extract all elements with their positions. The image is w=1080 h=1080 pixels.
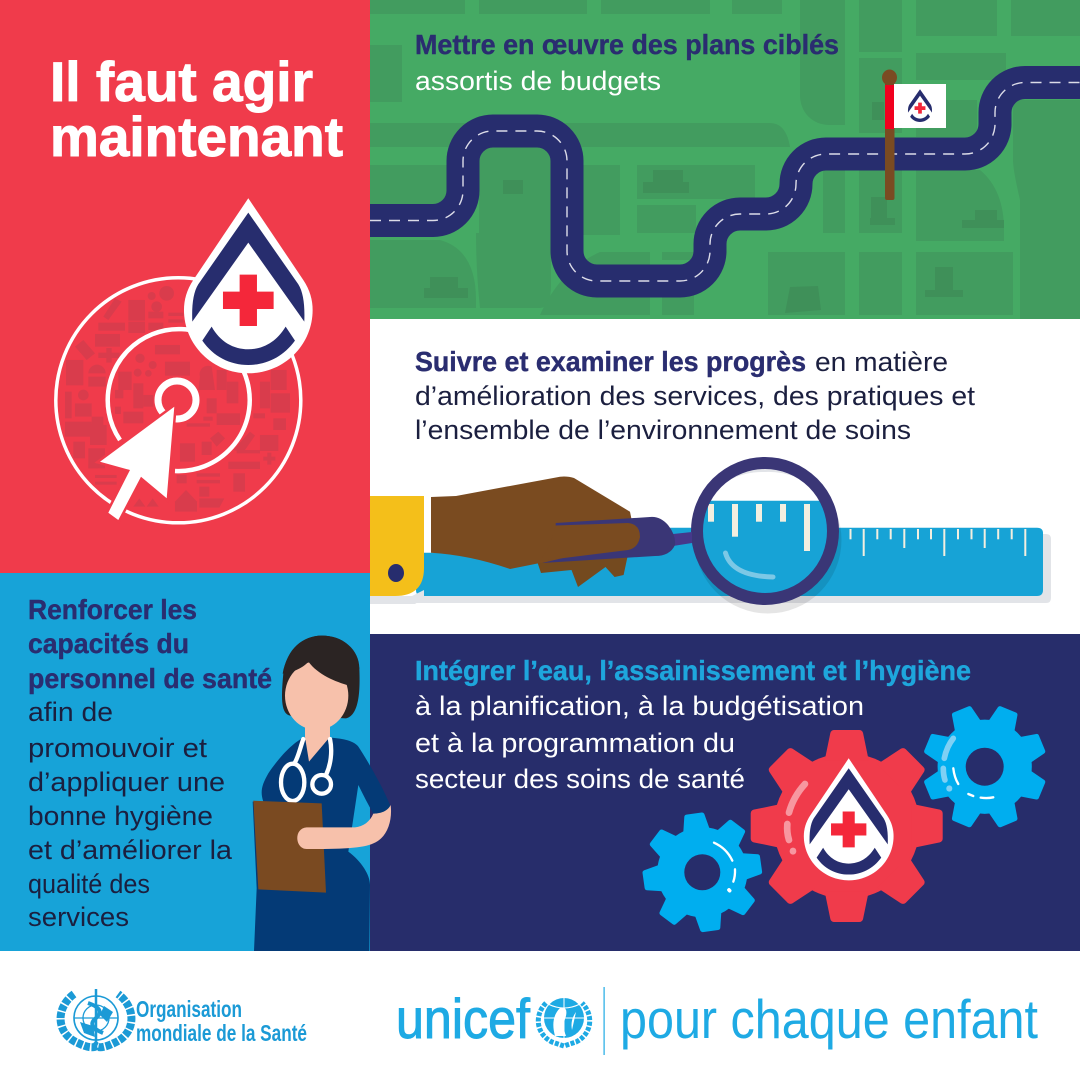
text: integrate water sanitation hygiene <box>415 655 971 794</box>
text: monitor and review progress: Suivre et examiner les progrès <box>415 346 806 377</box>
text: strengthen health workforce: afin de <box>28 697 113 727</box>
cuff shadow <box>370 590 424 604</box>
text: integrate water sanitation hygiene: et à la programmation du <box>415 728 735 758</box>
icon: hand holding magnifier <box>431 477 692 587</box>
unicef emblem <box>538 998 590 1046</box>
text: strengthen health workforce: services <box>28 902 129 932</box>
text: monitor and review progress: d’amélioration des services, des pratiques et <box>415 381 976 411</box>
text: strengthen health workforce: personnel de santé <box>28 663 272 694</box>
panel: monitoring progress <box>370 346 1051 614</box>
heading: il faut agir maintenant: maintenant <box>50 105 343 168</box>
text: monitor and review progress: en matière <box>815 347 948 377</box>
text: monitor and review progress: l’ensemble de l’environnement de soins <box>415 415 911 445</box>
nurse fringe <box>283 636 359 686</box>
text: monitor and review progress <box>415 346 976 445</box>
icon: nurse with clipboard <box>253 636 391 951</box>
text: strengthen health workforce: promouvoir et <box>28 733 208 763</box>
cuff with button <box>370 496 424 596</box>
target outer ring <box>56 278 301 523</box>
logo: world health organization <box>61 989 307 1047</box>
heading: il faut agir maintenant: Il faut agir <box>50 50 313 113</box>
ruler shadow <box>376 534 1051 603</box>
nurse stethoscope <box>281 739 331 801</box>
nurse dress <box>253 737 390 951</box>
icon: water drop with cross <box>184 198 313 373</box>
icon: right blue gear <box>904 686 1066 848</box>
unicef divider <box>604 987 605 1055</box>
panel: health workforce <box>0 573 370 951</box>
who name <box>136 996 307 1046</box>
target middle ring <box>108 329 250 471</box>
target icon pattern <box>65 286 290 512</box>
map buildings <box>424 102 1004 313</box>
ruler <box>416 528 1043 596</box>
text: strengthen health workforce: d’appliquer une <box>28 767 225 797</box>
text: integrate water sanitation hygiene: à la planification, à la budgétisation <box>415 691 864 721</box>
text: integrate water sanitation hygiene: secteur des soins de santé <box>415 764 745 794</box>
road <box>370 82 1080 281</box>
logo: unicef <box>396 987 1038 1055</box>
text: strengthen health workforce <box>28 594 272 932</box>
panel: integrate wash <box>370 634 1080 951</box>
text: strengthen health workforce: Renforcer les <box>28 594 197 625</box>
icon: left blue gear <box>635 805 769 939</box>
nurse neck <box>305 722 330 763</box>
nurse clipboard <box>253 801 326 893</box>
nurse face <box>285 661 348 730</box>
cursor arrow <box>100 407 174 520</box>
who name: mondiale de la Santé <box>136 1020 307 1046</box>
text: targeted plans: Mettre en œuvre des plans ciblés <box>415 29 839 60</box>
text: integrate water sanitation hygiene: Intégrer l’eau, l’assainissement et l’hygiène <box>415 655 971 686</box>
who emblem <box>61 989 131 1047</box>
heading: il faut agir maintenant <box>50 50 343 168</box>
target centre ring <box>158 381 196 419</box>
text: strengthen health workforce: et d’améliorer la <box>28 835 233 865</box>
nurse arm <box>297 805 391 849</box>
icon: red gear with drop <box>751 730 943 922</box>
who name: Organisation <box>136 996 242 1022</box>
unicef wordmark: unicef <box>396 987 530 1050</box>
icon: magnifier <box>694 463 842 614</box>
slogan: pour chaque enfant <box>620 988 1038 1050</box>
icon: target with cursor and drop <box>56 198 313 523</box>
panel: red call to action <box>0 0 370 573</box>
ruler ticks <box>850 529 1026 556</box>
text: targeted plans <box>415 29 839 96</box>
text: targeted plans: assortis de budgets <box>415 66 661 96</box>
text: strengthen health workforce: qualité des <box>28 869 150 899</box>
city map blocks <box>370 0 1080 319</box>
icon: flag on pole <box>882 70 946 200</box>
text: strengthen health workforce: bonne hygiène <box>28 801 213 831</box>
panel: targeted plans <box>370 0 1080 319</box>
nurse hair <box>282 636 360 718</box>
text: strengthen health workforce: capacités du <box>28 628 189 659</box>
